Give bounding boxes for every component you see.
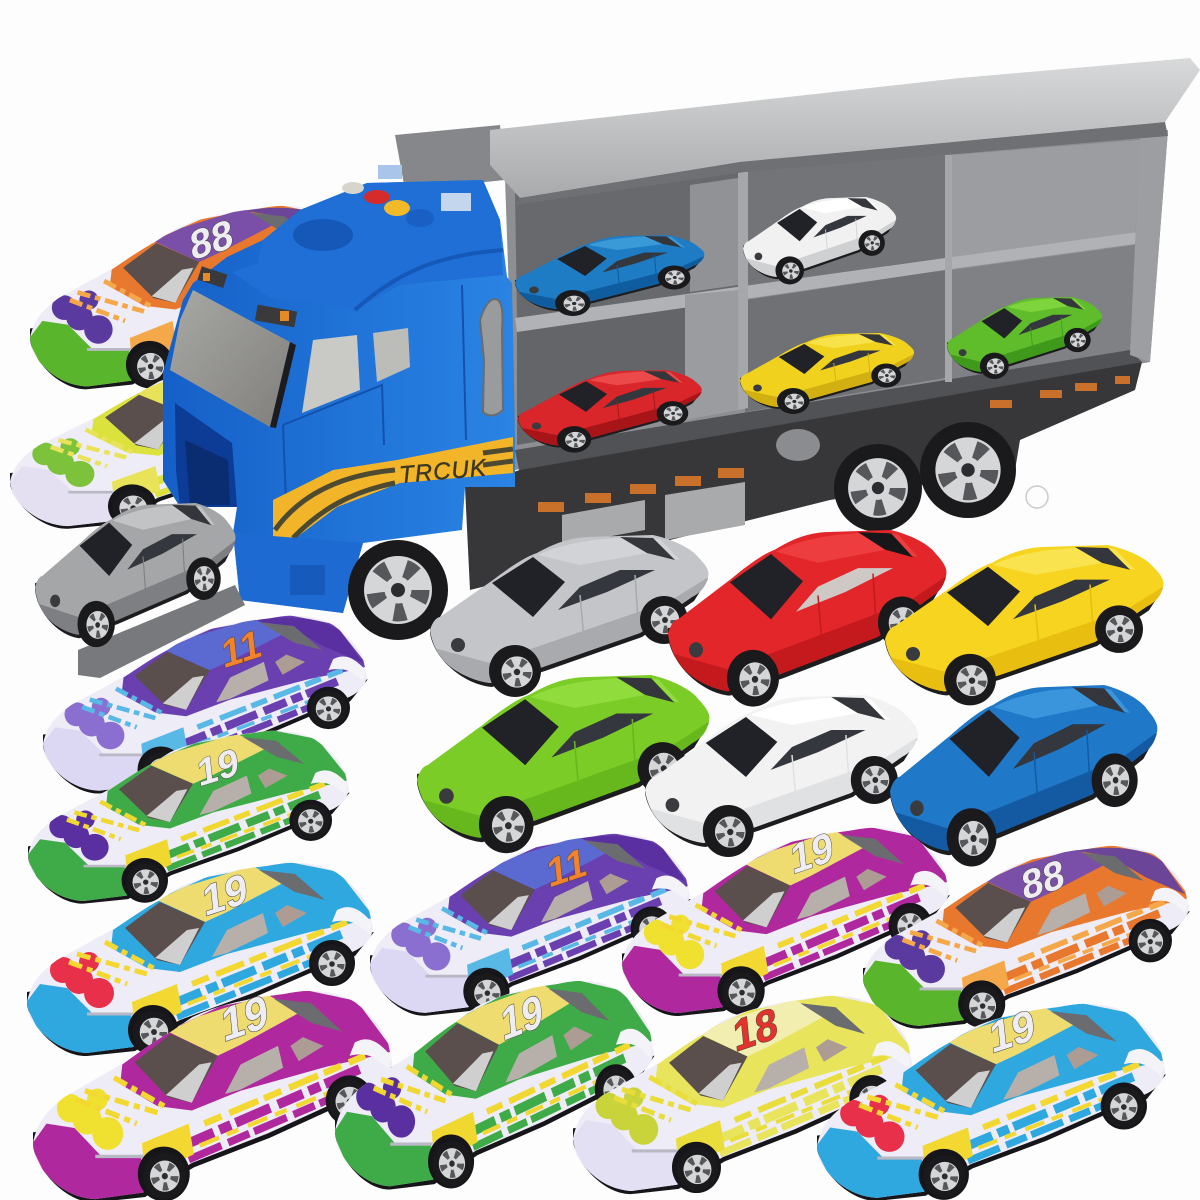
bumper vents (290, 565, 325, 595)
car in truck: blue (515, 235, 709, 316)
small ring (1026, 486, 1048, 508)
race car: 11 middle (368, 833, 691, 1017)
car: green (417, 675, 716, 853)
car: blue (890, 685, 1164, 866)
race car: 19 purple (620, 822, 950, 1017)
cab lights (197, 266, 297, 327)
visor (232, 262, 305, 302)
race car: yellow behind truck (8, 360, 347, 530)
hinge (776, 429, 820, 461)
race car: 19 green bottom: 19 (499, 985, 545, 1052)
race car: 19 purple bottom (31, 984, 393, 1200)
race car: 19 blue bottom: 19 (987, 1000, 1037, 1064)
car: silver (430, 535, 715, 697)
yellow stripes (273, 437, 513, 540)
race car: 18 yellow: 18 (731, 998, 780, 1062)
logo: TRCUK (398, 454, 488, 489)
front wheel (348, 540, 448, 640)
orange chassis lights (538, 376, 1130, 512)
race car: 88 right (861, 845, 1190, 1030)
car: white (645, 695, 924, 857)
race car: 88 right: 88 (1020, 850, 1066, 909)
race car: 11 middle: 11 (545, 839, 589, 897)
speaker (293, 219, 353, 251)
race car: 88 behind truck: 88 (188, 210, 235, 270)
trailer rear wall (505, 130, 1168, 470)
car in truck: red (518, 370, 706, 453)
car in truck: green (947, 297, 1106, 379)
car in truck: yellow (740, 333, 918, 414)
race car: 18 yellow (571, 995, 913, 1195)
race car: 19 green: 19 (195, 740, 241, 796)
cab (163, 165, 515, 613)
fuel tanks (562, 482, 745, 545)
truck (163, 58, 1200, 640)
ramp (78, 585, 245, 678)
race car: 19 purple bottom: 19 (219, 984, 270, 1052)
race car: 19 blue: 19 (200, 864, 250, 926)
trailer shelves (515, 130, 1168, 475)
race car: 11 top (41, 615, 368, 794)
trailer lid (395, 58, 1200, 205)
exhaust pipe (480, 299, 503, 416)
car: red (668, 530, 953, 707)
race car: 88 behind truck (28, 205, 360, 390)
silver car on ramp (35, 503, 240, 647)
race car: 19 blue bottom (815, 1000, 1166, 1200)
car in truck: white (743, 197, 900, 284)
race car: 19 blue (25, 862, 374, 1057)
bumper (233, 533, 363, 613)
race car: 19 green bottom (333, 980, 655, 1191)
race car: 11 top: 11 (219, 621, 264, 677)
car: yellow (885, 545, 1170, 705)
front opening (175, 403, 237, 507)
chassis (465, 362, 1142, 590)
roof panel (257, 180, 503, 310)
roof buttons (342, 165, 471, 227)
rear wheels (834, 422, 1016, 532)
side windows (302, 335, 360, 413)
windshield (170, 290, 290, 427)
race car: 19 green (26, 730, 350, 905)
cab door lines (283, 285, 466, 500)
race car: 19 purple: 19 (789, 822, 835, 883)
